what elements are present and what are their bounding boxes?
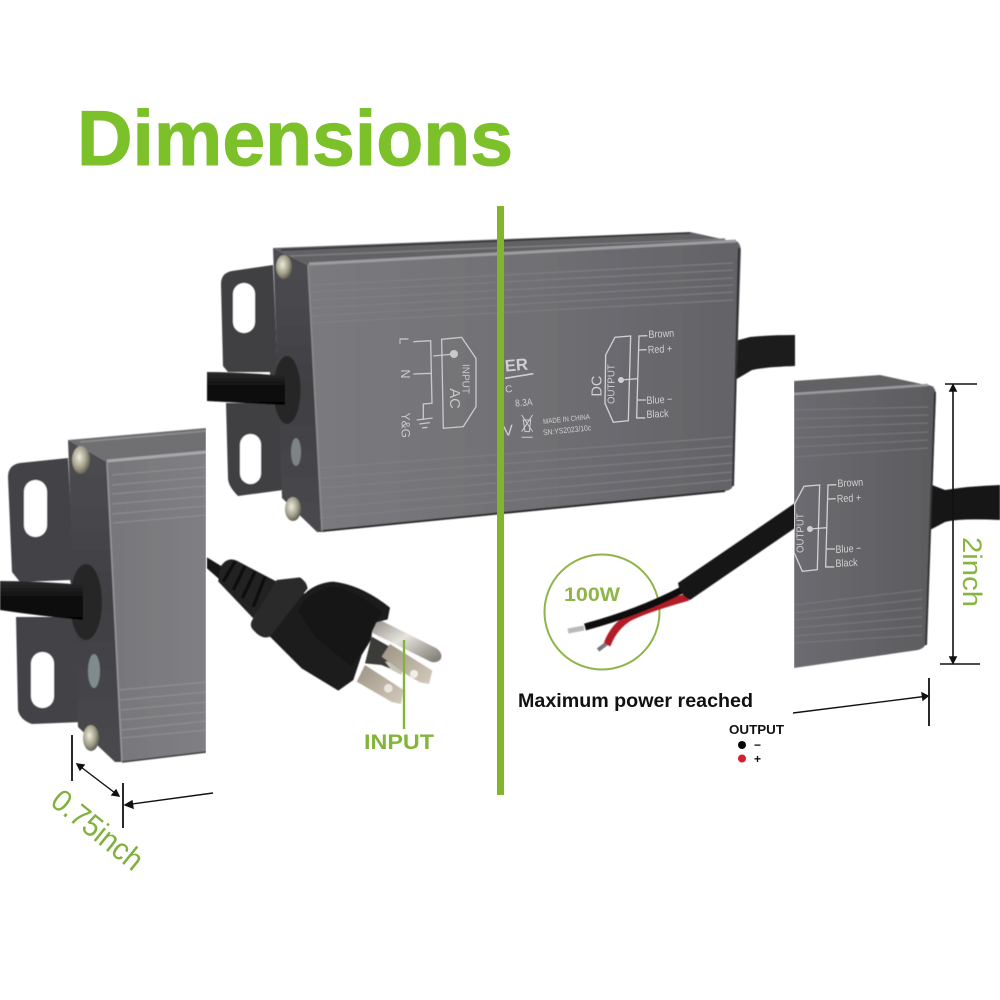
terminal dot	[450, 350, 458, 358]
bottom screw	[285, 497, 301, 521]
height dimension 2 inch	[793, 384, 980, 726]
left top screw	[72, 446, 90, 474]
output cable with wires	[568, 503, 795, 650]
wiring lines	[621, 336, 647, 418]
face highlights and ribs	[281, 233, 739, 531]
left unit ribs	[80, 431, 206, 762]
blade hole front	[384, 684, 393, 693]
shadow between blades	[365, 637, 402, 673]
plug collar	[251, 577, 308, 637]
red wire	[607, 597, 688, 645]
output wiring label on main unit	[502, 328, 674, 440]
100W label: 100W	[564, 585, 620, 606]
rear blade	[382, 644, 432, 684]
input wiring label	[396, 337, 476, 438]
INPUT label: INPUT	[460, 364, 471, 394]
right extension line	[928, 678, 930, 726]
end plate	[273, 248, 322, 532]
plug cord	[207, 557, 225, 578]
brand and rating text	[502, 355, 592, 440]
brand and rating text: 8.3A	[515, 396, 534, 409]
brand and rating text: SN:YS2023/10c	[543, 423, 592, 437]
2inch label: 2inch	[957, 537, 987, 607]
brand underline	[505, 374, 533, 378]
output legend	[729, 723, 784, 766]
right unit cable	[930, 485, 1000, 530]
wiring lines	[413, 341, 454, 428]
DC output block outline	[605, 336, 631, 422]
wire colour labels	[646, 328, 674, 421]
input cable on main unit	[207, 372, 285, 405]
negative sign: −	[754, 738, 761, 752]
legend title: OUTPUT	[729, 723, 784, 737]
OUTPUT label: OUTPUT	[607, 364, 618, 404]
INPUT label: INPUT	[364, 731, 434, 754]
maximum power caption: Maximum power reached	[518, 691, 753, 712]
brand and rating text: ER	[504, 355, 529, 376]
negative dot	[738, 741, 746, 749]
left unit end plate	[68, 440, 122, 762]
positive sign: +	[754, 752, 761, 766]
left bracket slot upper	[24, 480, 47, 537]
height extension lines	[940, 384, 980, 664]
AC input block outline	[442, 337, 476, 428]
left bracket	[8, 458, 82, 724]
mounting bracket	[221, 265, 283, 496]
stripped red end	[598, 644, 606, 650]
title: Dimensions	[77, 94, 513, 182]
output wire colour labels	[836, 480, 863, 567]
top surface	[273, 232, 740, 265]
brand and rating text: V	[502, 422, 515, 440]
front face	[308, 240, 741, 531]
hex vent	[291, 438, 301, 466]
wire colour labels: Brown	[648, 328, 674, 341]
body shading	[298, 587, 382, 667]
INPUT callout line	[403, 640, 405, 729]
bracket slot lower	[240, 434, 261, 484]
bracket slot upper	[233, 283, 255, 333]
wire colour labels: Black	[646, 408, 669, 421]
length arrow right	[793, 693, 928, 713]
0.75inch label: 0.75inch	[45, 782, 151, 877]
right end of unit	[794, 375, 1000, 668]
output terminal dot	[807, 526, 813, 532]
left unit face	[107, 453, 206, 762]
left bottom screw	[83, 725, 99, 751]
output cable on main unit	[735, 335, 795, 380]
left bracket slot lower	[31, 652, 54, 708]
N label: N	[398, 369, 412, 378]
light inner blade side	[385, 662, 402, 675]
output wire colour labels: Black	[835, 557, 858, 570]
left hex vent	[88, 654, 100, 688]
brand and rating text: C	[505, 384, 513, 396]
length arrow	[125, 793, 213, 808]
left unit grommet	[70, 564, 102, 640]
top screw	[276, 255, 292, 279]
AC label: AC	[446, 388, 462, 409]
strain relief	[218, 559, 277, 618]
centre divider	[497, 206, 504, 795]
wire colour labels: Blue −	[646, 394, 673, 407]
positive dot	[738, 754, 746, 762]
stripped black end	[568, 628, 584, 631]
wire colour labels: Red +	[648, 343, 673, 357]
extension lines	[72, 735, 123, 828]
AC plug	[207, 557, 441, 704]
DC label: DC	[590, 375, 606, 397]
right unit wiring label	[794, 477, 863, 571]
right unit face	[794, 385, 936, 668]
blade hole rear	[410, 670, 418, 678]
depth dimension 0.75 inch	[72, 735, 213, 828]
left end view of unit	[0, 428, 206, 762]
left unit cable	[0, 581, 83, 620]
Y and G label: Y&G	[399, 413, 413, 438]
left unit top surface	[68, 428, 206, 462]
output wire colour labels: Red +	[837, 492, 862, 506]
output wire colour labels: Blue −	[835, 543, 862, 556]
rubber grommet	[274, 356, 300, 424]
100W circle	[544, 554, 660, 670]
right unit top surface	[794, 375, 935, 395]
brand and rating text: MADE IN CHINA	[543, 414, 591, 426]
main driver unit	[207, 232, 795, 532]
output label: OUTPUT	[796, 513, 807, 553]
output block outline	[794, 485, 820, 571]
output wiring lines	[810, 485, 836, 567]
height arrow	[950, 385, 956, 663]
depth arrow	[77, 764, 119, 796]
round ground pin	[372, 618, 441, 662]
output wire colour labels: Brown	[837, 477, 863, 490]
L label: L	[396, 337, 410, 344]
recycling bin mark	[522, 415, 533, 437]
black wire	[585, 590, 682, 627]
strain relief ribs	[223, 562, 265, 607]
front blade	[357, 665, 404, 704]
terminal dot	[618, 377, 624, 383]
plug body	[267, 582, 390, 691]
right unit ribs	[794, 385, 935, 645]
black sheath	[678, 503, 795, 600]
